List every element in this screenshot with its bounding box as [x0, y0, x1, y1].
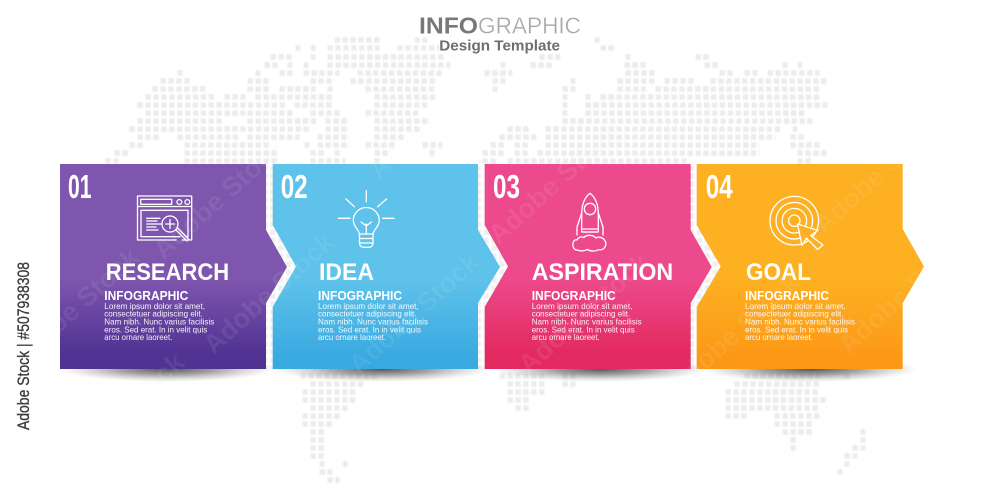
- subheading: INFOGRAPHIC: [318, 289, 402, 303]
- body text: [745, 301, 855, 342]
- body text: Lorem ipsum dolor sit amet,: [104, 301, 205, 311]
- body text: eros. Sed erat. In in velit quis: [104, 324, 207, 334]
- icon: rocket: [573, 193, 606, 251]
- body text: arcu ornare laoreet.: [532, 332, 600, 342]
- stock watermarks: Adobe Stock: [33, 41, 176, 175]
- heading: GOAL: [746, 259, 811, 286]
- body text: [318, 301, 428, 342]
- heading: ASPIRATION: [532, 259, 673, 286]
- body text: Lorem ipsum dolor sit amet,: [318, 301, 419, 311]
- body text: consectetuer adipiscing elit.: [532, 309, 630, 319]
- body text: Nam nibh. Nunc varius facilisis: [745, 316, 855, 326]
- body text: eros. Sed erat. In in velit quis: [745, 324, 848, 334]
- body text: eros. Sed erat. In in velit quis: [532, 324, 635, 334]
- panel background: [273, 164, 500, 369]
- stock watermarks: Stock: [232, 402, 307, 474]
- body text: Nam nibh. Nunc varius facilisis: [532, 316, 642, 326]
- number: 03: [493, 168, 520, 205]
- stock watermarks: Adobe Stock: [48, 346, 191, 480]
- panel background: [60, 164, 287, 369]
- stock watermarks: Adobe Stock: [483, 116, 626, 250]
- number: 01: [68, 168, 92, 205]
- panel background: [485, 164, 712, 369]
- body text: [104, 301, 214, 342]
- stock watermarks: Adobe Stock: [513, 246, 656, 380]
- icon: light bulb: [338, 191, 394, 247]
- subheading: INFOGRAPHIC: [532, 289, 616, 303]
- stock watermarks: Adobe Stock: [3, 241, 146, 375]
- body text: consectetuer adipiscing elit.: [104, 309, 203, 319]
- stock watermarks: Adobe Stock: [363, 51, 506, 185]
- panel 03: aspiration: [485, 164, 712, 369]
- heading: IDEA: [319, 259, 374, 286]
- stock watermarks: Adobe Stock: [808, 106, 951, 240]
- body text: eros. Sed erat. In in velit quis: [318, 324, 421, 334]
- panel 01: research: [60, 164, 287, 369]
- body text: consectetuer adipiscing elit.: [745, 309, 844, 319]
- body text: Nam nibh. Nunc varius facilisis: [318, 316, 428, 326]
- body text: Lorem ipsum dolor sit amet,: [532, 301, 632, 311]
- stock id side label: Adobe Stock | #507938308: [15, 262, 33, 430]
- body text: [532, 301, 642, 342]
- subheading: INFOGRAPHIC: [104, 289, 188, 303]
- panel 02: idea: [273, 164, 500, 369]
- title: GRAPHIC: [478, 12, 581, 38]
- body text: consectetuer adipiscing elit.: [318, 309, 416, 319]
- body text: arcu ornare laoreet.: [318, 332, 386, 342]
- stock watermarks: Stock: [767, 397, 842, 469]
- panel 04: goal: [697, 164, 924, 369]
- title: INFO: [419, 12, 478, 38]
- number: 02: [281, 168, 308, 205]
- stock watermarks: Adobe Stock: [663, 266, 806, 400]
- body text: arcu ornare laoreet.: [104, 332, 172, 342]
- icon: browser with magnifier: [138, 196, 192, 241]
- stock watermarks: Adobe Stock: [148, 131, 291, 265]
- subheading: INFOGRAPHIC: [745, 289, 829, 303]
- body text: Lorem ipsum dolor sit amet,: [745, 301, 846, 311]
- stock watermarks: Adobe Stock: [563, 0, 706, 130]
- panel background: [697, 164, 924, 369]
- stock watermarks: Stock: [567, 412, 642, 484]
- stock watermarks: Stock: [427, 392, 502, 464]
- body text: Nam nibh. Nunc varius facilisis: [104, 316, 214, 326]
- stock watermarks: Adobe Stock: [343, 246, 486, 380]
- title: [419, 12, 581, 55]
- stock watermarks: Stock: [907, 402, 982, 474]
- heading: RESEARCH: [106, 259, 229, 286]
- stock watermarks: Adobe Stock: [833, 226, 976, 360]
- stock watermarks: Adobe Stock: [198, 226, 341, 360]
- panel shadows: [59, 356, 918, 382]
- icon: target with cursor: [770, 196, 823, 250]
- dotted world map background: [106, 40, 866, 480]
- body text: arcu ornare laoreet.: [745, 332, 813, 342]
- title: Design Template: [439, 39, 560, 55]
- number: 04: [706, 168, 733, 205]
